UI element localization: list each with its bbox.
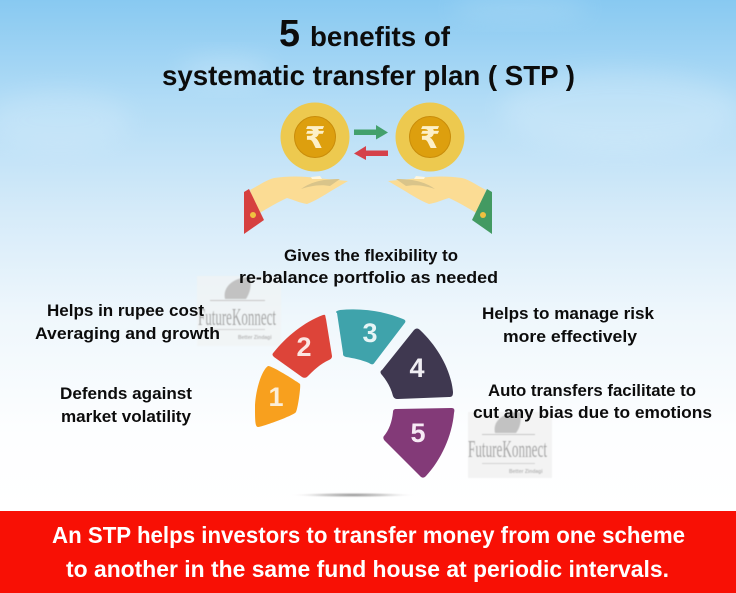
icon: left hand bbox=[244, 176, 348, 234]
segment 1 bbox=[255, 366, 300, 427]
text: rupee cost bbox=[35, 301, 220, 343]
segment 5 bbox=[383, 408, 454, 478]
title: systematic transfer plan ( STP ) bbox=[162, 60, 575, 91]
text: rupee cost: Averaging and growth bbox=[35, 324, 220, 343]
icon: right coin: ₹ bbox=[420, 121, 440, 156]
text: rupee cost: Helps in rupee cost bbox=[47, 301, 204, 320]
red footer band: An STP helps investors to transfer money from one scheme bbox=[52, 522, 685, 548]
text: volatility: market volatility bbox=[61, 407, 192, 426]
text: manage risk bbox=[482, 304, 655, 346]
text: flexibility: Gives the flexibility to bbox=[284, 246, 458, 265]
arrow: green right bbox=[354, 125, 388, 140]
watermark: top left: FutureKonnect bbox=[198, 305, 276, 331]
watermark: bottom right bbox=[468, 412, 552, 478]
red footer band: to another in the same fund house at periodic intervals. bbox=[66, 556, 669, 582]
icon: right coin bbox=[396, 102, 464, 172]
icon: right hand bbox=[388, 176, 492, 234]
title: 5 bbox=[279, 13, 300, 55]
arrow: red left bbox=[354, 146, 388, 160]
segment 1: 1 bbox=[268, 382, 284, 412]
text: auto transfers bbox=[473, 381, 712, 422]
text: flexibility bbox=[239, 246, 498, 287]
text: auto transfers: cut any bias due to emotions bbox=[473, 403, 712, 422]
watermark: bottom right: FutureKonnect bbox=[468, 437, 547, 463]
segment 3 bbox=[336, 309, 405, 364]
watermark: top left bbox=[197, 276, 281, 346]
text: flexibility: re-balance portfolio as needed bbox=[239, 268, 498, 287]
text: auto transfers: Auto transfers facilitate to bbox=[488, 381, 696, 400]
red footer band bbox=[0, 511, 736, 593]
text: manage risk: Helps to manage risk bbox=[482, 304, 655, 323]
watermark: top left: Better Zindagi bbox=[238, 335, 272, 341]
title bbox=[162, 13, 575, 91]
segment 2: 2 bbox=[296, 332, 312, 362]
text: volatility: Defends against bbox=[60, 384, 192, 403]
icon: left coin: ₹ bbox=[305, 121, 325, 156]
text: manage risk: more effectively bbox=[503, 327, 638, 346]
segment 5: 5 bbox=[410, 418, 426, 448]
segment 4 bbox=[380, 328, 453, 399]
watermark: bottom right: Better Zindagi bbox=[509, 469, 543, 475]
icon: left coin bbox=[280, 102, 350, 172]
segments shadow bbox=[289, 492, 417, 498]
segment 2 bbox=[272, 315, 332, 378]
segment 4: 4 bbox=[409, 353, 425, 383]
text: volatility bbox=[60, 384, 192, 426]
title: benefits of bbox=[310, 21, 451, 52]
segment 3: 3 bbox=[362, 318, 378, 348]
